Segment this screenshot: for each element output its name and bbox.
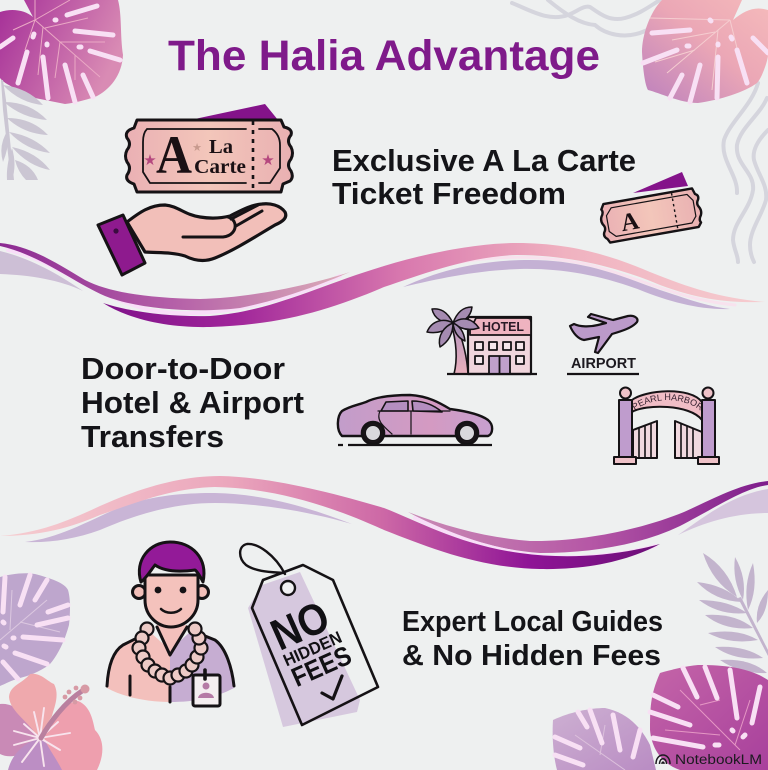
icon: no hidden fees tag: NO <box>264 592 337 660</box>
main ticket: ★ <box>192 142 202 154</box>
ribbon divider 1 <box>0 243 765 327</box>
decorative grey wave lines, top and right <box>512 0 768 262</box>
heading: a la carte: Ticket Freedom <box>332 176 566 211</box>
leaf: top-left grey palm frond <box>1 80 50 180</box>
icon: no hidden fees tag: HIDDEN <box>280 628 345 670</box>
icon: no hidden fees tag: FEES <box>287 640 356 693</box>
watermark: NotebookLM: NotebookLM <box>675 752 762 767</box>
icon: a la carte ticket held by hand <box>98 104 292 275</box>
leaf: left monstera <box>0 573 70 686</box>
heading: a la carte <box>332 143 636 211</box>
heading: guides and fees: & No Hidden Fees <box>402 640 661 672</box>
main ticket <box>126 120 292 192</box>
icon: pearl harbor gate: PEARL HARBOR <box>633 394 701 410</box>
leaf: bottom-right monstera <box>650 665 768 770</box>
heading: transfers: Door-to-Door <box>81 351 285 386</box>
leaf: top-left monstera <box>0 0 123 104</box>
icon: pearl harbor gate <box>613 386 720 465</box>
leaf: top-right pink monstera <box>642 0 768 103</box>
head <box>132 586 146 598</box>
icon: small ticket: A <box>619 207 641 237</box>
icon: local guide with lei <box>107 542 234 706</box>
icon: car <box>338 395 492 445</box>
hand <box>98 204 286 275</box>
heading: transfers: Transfers <box>81 419 224 454</box>
ribbon divider 2 <box>0 476 768 569</box>
leaf: bottom-right palm frond <box>697 553 768 673</box>
heading: guides and fees: Expert Local Guides <box>402 606 663 638</box>
leaf: bottom-centre monstera <box>553 708 656 770</box>
main ticket: ★ <box>261 152 275 169</box>
icon: airplane with airport label: AIRPORT <box>571 355 636 372</box>
heading: transfers <box>81 351 304 454</box>
id badge <box>193 675 220 706</box>
main ticket: La <box>209 136 233 158</box>
icon: hotel with palm <box>427 307 537 374</box>
icon: no hidden fees tag <box>240 544 378 727</box>
main ticket: Carte <box>194 156 246 178</box>
main ticket: A <box>156 125 192 185</box>
main ticket: ★ <box>143 152 157 169</box>
icon: hibiscus flower <box>0 674 102 770</box>
heading: transfers: Hotel & Airport <box>81 385 304 420</box>
icon: small ticket <box>598 172 704 243</box>
ticket flap <box>190 104 278 120</box>
icon: hotel with palm: HOTEL <box>482 319 524 334</box>
icon: airplane with airport label <box>567 314 639 374</box>
torso <box>107 632 170 702</box>
heading: a la carte: Exclusive A La Carte <box>332 143 636 178</box>
title: The Halia Advantage <box>168 32 600 80</box>
heading: guides and fees <box>402 606 663 672</box>
lei <box>132 622 208 684</box>
